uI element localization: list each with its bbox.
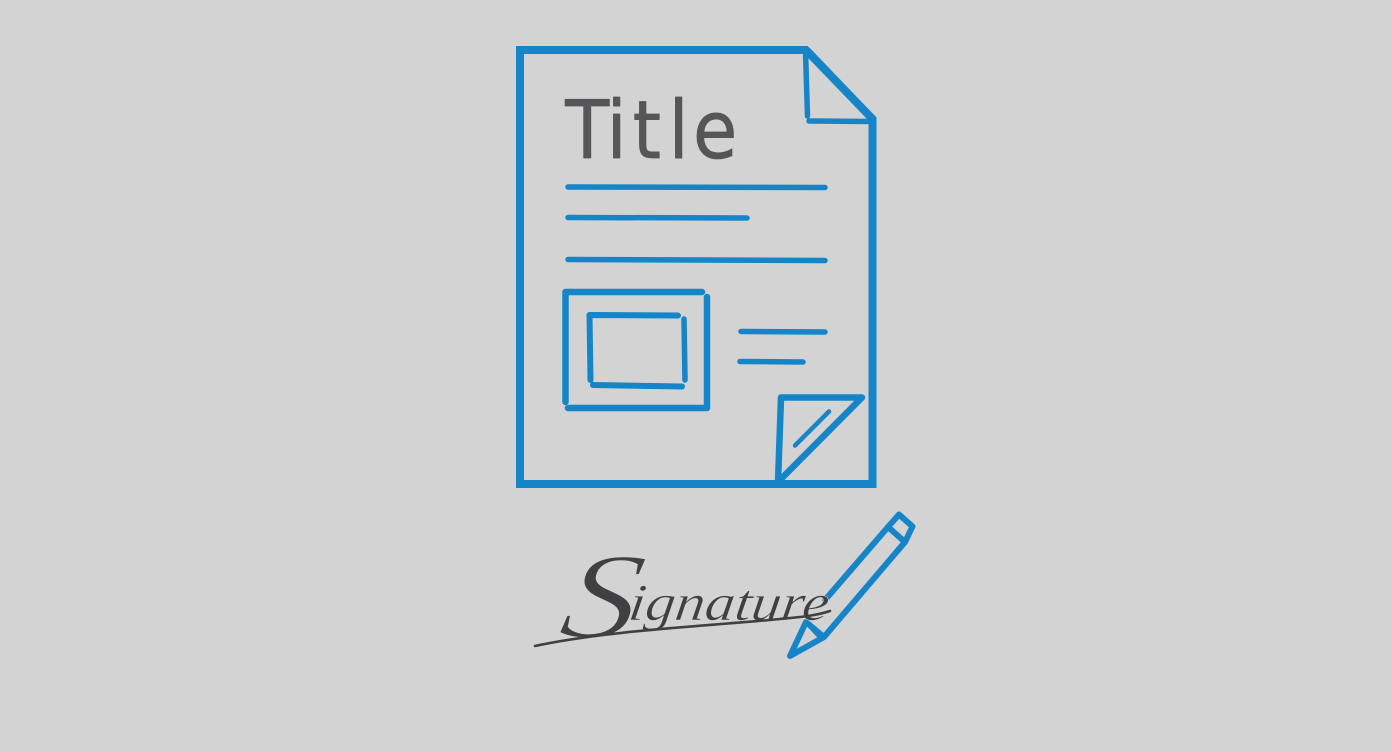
text line 2 — [568, 215, 747, 221]
signature underline stroke — [535, 611, 830, 646]
caption line 2 — [740, 359, 803, 365]
signature — [535, 529, 833, 664]
signature remaining letters: ignature — [625, 574, 833, 632]
icon: document page — [520, 50, 872, 484]
text line 3 — [568, 260, 825, 261]
image placeholder — [566, 292, 707, 408]
caption line 1 — [741, 329, 825, 335]
signature initial text: S — [550, 529, 655, 664]
icon: pencil — [790, 514, 912, 656]
title text: Title — [564, 83, 737, 177]
sticker — [778, 398, 862, 482]
page outline — [520, 50, 872, 484]
folded corner — [806, 50, 872, 122]
text line 1 — [568, 184, 825, 190]
